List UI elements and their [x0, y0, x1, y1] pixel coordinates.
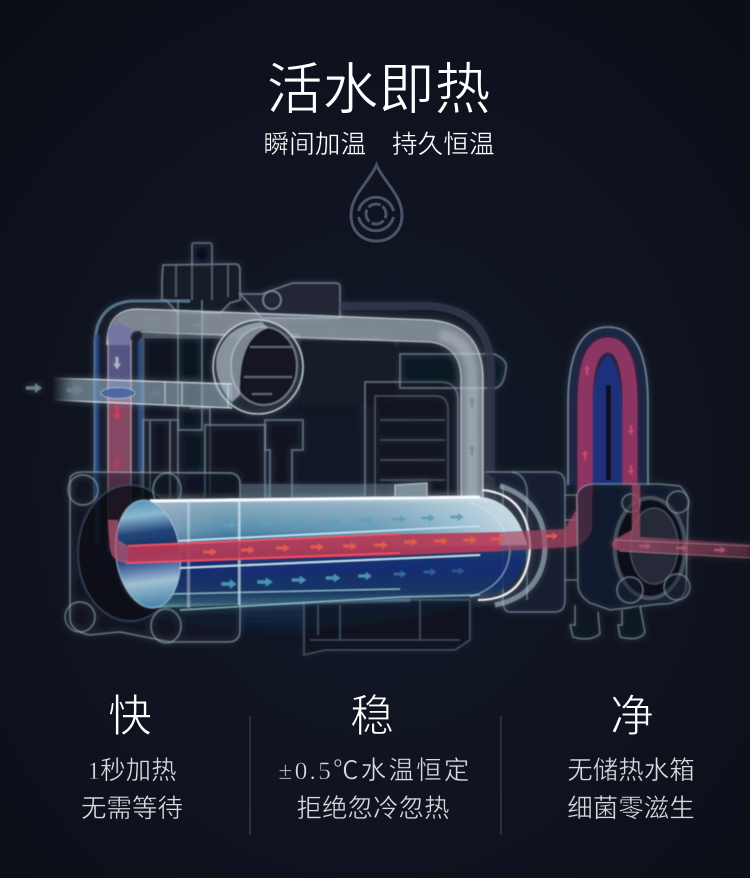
- feature: 稳: 拒绝忽冷忽热: [296, 794, 450, 823]
- highlights: [150, 497, 480, 501]
- outer rear pipe: [95, 301, 190, 500]
- description: ±0.5℃水温恒定: [278, 756, 472, 785]
- main cylinder: [110, 483, 545, 611]
- rear sleeve: [240, 484, 395, 498]
- U tube: [568, 327, 648, 495]
- rear housing and valve: [95, 243, 506, 520]
- lower housing: [304, 600, 470, 655]
- title: 活水即热: [266, 60, 490, 122]
- heading: 净: [610, 692, 654, 741]
- description: 1秒加热: [87, 756, 177, 785]
- feature: 稳: [278, 692, 472, 823]
- valve head: [162, 264, 240, 313]
- right screw block: [265, 420, 303, 500]
- end cap right: [478, 490, 530, 600]
- teal arrows upper: [223, 513, 464, 529]
- left screw block: [143, 420, 178, 500]
- cylinder body: [150, 497, 527, 608]
- collar band: [187, 500, 190, 608]
- collar ring: [213, 320, 303, 414]
- feature: 快: 无需等待: [81, 794, 183, 823]
- left flange: [65, 472, 240, 643]
- grey top pipe: [107, 309, 483, 498]
- right pump block: [365, 382, 458, 498]
- left descending hot pipe: [97, 323, 140, 552]
- pipe arrows: [148, 319, 475, 455]
- feet: [570, 605, 645, 639]
- valve stem: [192, 243, 212, 267]
- horizontal stub: [400, 354, 506, 388]
- oil plug: [395, 483, 427, 497]
- feature: 净: 细菌零滋生: [567, 794, 695, 823]
- outlet tube: [612, 484, 750, 558]
- icon: water drop: [351, 165, 402, 241]
- motor box: [240, 283, 340, 318]
- feature: 快: [81, 692, 183, 823]
- machine diagram: [26, 243, 750, 655]
- subtitle: 瞬间加温 持久恒温: [263, 130, 495, 159]
- divider: [500, 716, 502, 835]
- divider: [249, 716, 251, 835]
- feature: 净: [567, 692, 695, 823]
- small flange: [570, 484, 690, 639]
- centre column: [178, 300, 210, 520]
- teal arrows lower: [221, 567, 464, 589]
- description: 无储热水箱: [567, 756, 695, 785]
- right flange block: [485, 472, 577, 612]
- heading: 快: [108, 692, 152, 741]
- back panel behind collar: [300, 340, 395, 405]
- hot water tube: [108, 495, 592, 563]
- heading: 稳: [350, 692, 394, 741]
- inlet pipe: [26, 378, 232, 408]
- red arrows: [203, 532, 558, 556]
- inlet arrows: [26, 383, 161, 397]
- glow behind cylinder: [80, 495, 520, 625]
- left cap ellipse: [110, 497, 186, 611]
